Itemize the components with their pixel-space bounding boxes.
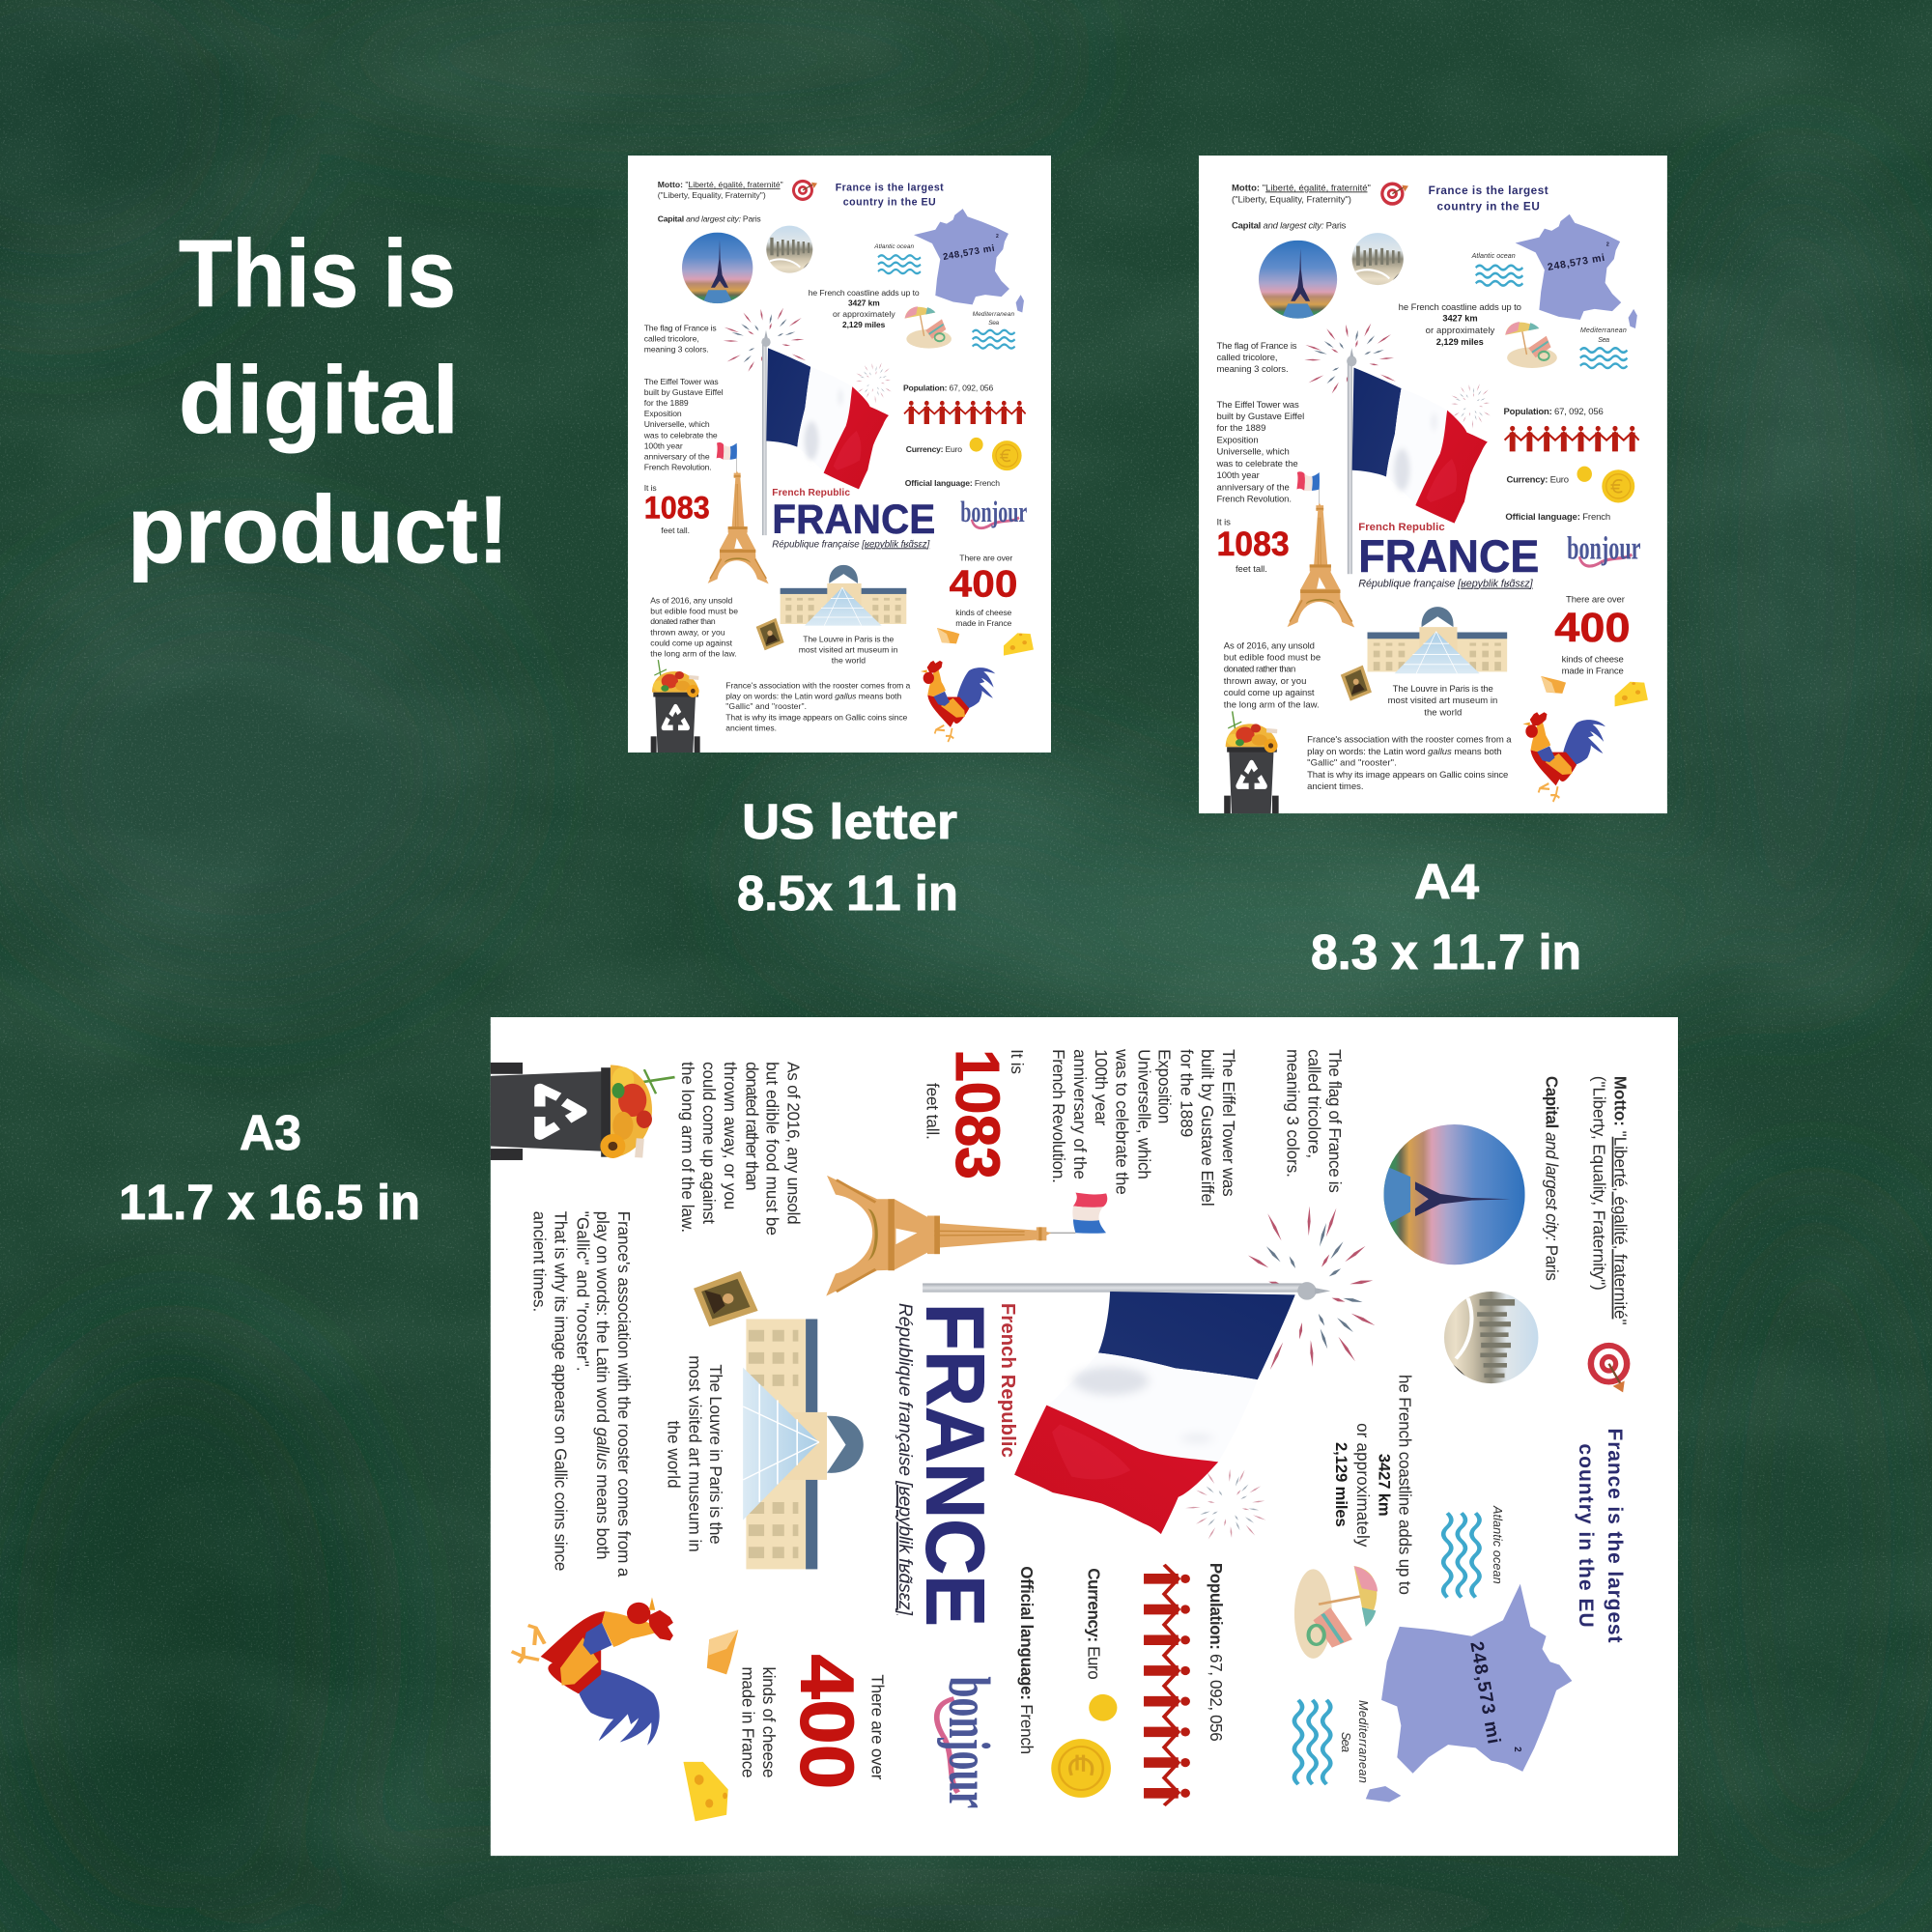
stat: 1083 feet: It is (1008, 1049, 1026, 1074)
icon: euro coins (1051, 1694, 1117, 1798)
icon: euro coins (1577, 467, 1634, 502)
title block: FRANCE (908, 1303, 1000, 1627)
stat: 1083 feet: 1083 (644, 491, 710, 526)
stat: 1083 feet: feet tall. (661, 526, 690, 535)
Eiffel history text: for the 1889 (1177, 1049, 1195, 1137)
photo: Paris bridge (765, 224, 814, 275)
map of France (914, 209, 1024, 312)
food law text: the long arm of the law. (650, 648, 737, 658)
Eiffel history text: built by Gustave Eiffel (644, 387, 724, 397)
photo: Eiffel Tower at dusk (679, 233, 756, 303)
artwork layer (1224, 182, 1648, 813)
Louvre text: most visited art museum in (1388, 696, 1497, 706)
fireworks small (1185, 1469, 1266, 1540)
bonjour lettering: bonjour (960, 495, 1027, 528)
motto: Motto: "Liberté, égalité, fraternité" (658, 180, 783, 189)
coastline text: he French coastline adds up to (809, 288, 920, 298)
icon: people (904, 401, 1026, 424)
coastline text: he French coastline adds up to (1399, 302, 1521, 313)
label: Mediterranean Sea (1339, 1700, 1370, 1783)
stat: 400 cheeses (1554, 594, 1631, 677)
stat: 1083 feet: 1083 (1216, 526, 1290, 563)
motto: Motto: " Liberté, égalité, fraternité " (1610, 1076, 1629, 1325)
stat: 400 cheeses (738, 1654, 886, 1790)
fireworks small (1451, 384, 1491, 428)
Louvre text: the world (1424, 707, 1462, 718)
stat: 400 cheeses: kinds of cheese (759, 1666, 778, 1777)
caption: A4 (1311, 854, 1581, 980)
caption: A3 (119, 1105, 420, 1230)
Eiffel history text: was to celebrate the (1113, 1048, 1131, 1195)
poster sheet (1199, 156, 1667, 813)
stat: 1083 feet: feet tall. (1236, 564, 1267, 575)
motto (658, 180, 783, 200)
capital: Capital and largest city: Paris (1232, 221, 1347, 232)
map of France (1516, 214, 1637, 328)
icon: beach (1294, 1566, 1378, 1659)
artwork layer (651, 180, 1034, 753)
language: Official language: French (1017, 1566, 1036, 1754)
Louvre text: most visited art museum in (799, 645, 898, 655)
motto: ("Liberty, Equality, Fraternity") (658, 190, 766, 200)
rooster text: "Gallic" and "rooster". (573, 1211, 591, 1372)
heading: largest country (1575, 1429, 1626, 1643)
Eiffel history text: The Eiffel Tower was (1216, 400, 1299, 411)
bonjour swirl (972, 518, 1019, 528)
label: Atlantic ocean: Atlantic ocean (1471, 253, 1516, 260)
food law text: donated rather than (1224, 664, 1295, 674)
stat: 1083 feet (923, 1049, 1026, 1179)
photo: Eiffel Tower at dusk (1256, 241, 1342, 319)
food law text: thrown away, or you (721, 1062, 739, 1209)
rooster text: ancient times. (1307, 781, 1363, 792)
population: Population: 67, 092, 056 (1503, 407, 1604, 417)
title block: French Republic (1358, 522, 1445, 533)
poster: A4 (1199, 156, 1667, 813)
Eiffel history text: for the 1889 (1216, 423, 1265, 434)
coastline text (1399, 302, 1521, 347)
food law text: As of 2016, any unsold (783, 1062, 803, 1225)
motto: ("Liberty, Equality, Fraternity") (1589, 1076, 1608, 1291)
food law text: the long arm of the law. (678, 1062, 696, 1233)
Eiffel history text: French Revolution. (1216, 494, 1292, 504)
food law text: could come up against (650, 638, 733, 647)
rooster text: That is why its image appears on Gallic coins since (1307, 770, 1508, 781)
caption: US letter: US letter (742, 794, 957, 849)
Eiffel history text: 100th year (1092, 1049, 1110, 1126)
Eiffel history text (1215, 400, 1304, 504)
icon: Mediterranean waves (1294, 1700, 1330, 1784)
stat: 400 cheeses: 400 (784, 1654, 868, 1790)
headline: product! (128, 476, 509, 582)
Eiffel history text: anniversary of the (1070, 1049, 1089, 1179)
Eiffel history text: built by Gustave Eiffel (1198, 1049, 1216, 1207)
poster: A3 rotated (491, 1017, 1678, 1856)
icon: cheese block (1615, 682, 1648, 706)
rooster text: France's association with the rooster comes from a (614, 1211, 633, 1577)
language: Official language: French (1505, 512, 1610, 523)
Eiffel history text: anniversary of the (644, 451, 710, 461)
heading: largest country: France is the largest (836, 182, 944, 193)
rooster text (725, 680, 911, 732)
icon: cheese wedge (937, 628, 959, 643)
heading: largest country (1429, 185, 1548, 213)
stat: 1083 feet: It is (644, 483, 657, 493)
rooster text: "Gallic" and "rooster". (1307, 757, 1397, 768)
Louvre text (1388, 684, 1497, 718)
label: Mediterranean Sea: Mediterranean (1356, 1700, 1370, 1783)
food law text (1224, 641, 1321, 710)
coastline text: he French coastline adds up to (1396, 1375, 1414, 1595)
Louvre text: the world (664, 1421, 682, 1489)
map area label (1547, 242, 1609, 273)
tricolore text (644, 324, 717, 354)
title block: French Republic (772, 488, 850, 498)
Louvre text (664, 1355, 724, 1552)
Eiffel history text: French Revolution. (644, 462, 712, 471)
poster sheet (491, 1017, 1678, 1856)
Louvre text: The Louvre in Paris is the (803, 635, 895, 644)
Eiffel history text: 100th year (644, 440, 683, 450)
Eiffel history text (643, 377, 724, 471)
Eiffel history text (1049, 1048, 1237, 1207)
headline: This is (179, 220, 456, 327)
stat: 400 cheeses: 400 (950, 563, 1017, 605)
coastline text: 3427 km (848, 298, 880, 307)
map area label: 2 (1606, 242, 1609, 248)
rooster text: ancient times. (725, 723, 777, 732)
Eiffel Tower (1288, 502, 1354, 628)
tricolore text: called tricolore, (1305, 1049, 1323, 1158)
poster sheet (628, 156, 1051, 753)
title block: République française [ʁepyblik fʁɑ̃sɛz] (895, 1303, 916, 1616)
food law text: the long arm of the law. (1224, 699, 1320, 710)
stat: 400 cheeses: kinds of cheese (1562, 655, 1624, 666)
currency: Currency: Euro (1506, 474, 1569, 485)
motto (1232, 183, 1371, 205)
Louvre text: the world (832, 656, 866, 666)
Eiffel history text: 100th year (1216, 470, 1260, 481)
Eiffel history text: was to celebrate the (643, 430, 718, 440)
map area label: 248,573 mi (1547, 252, 1605, 273)
tricolore text: called tricolore, (644, 333, 699, 343)
capital: Capital and largest city: Paris (1543, 1076, 1561, 1281)
label: Mediterranean Sea: Sea (988, 320, 999, 327)
rooster text: play on words: the Latin word gallus means both (1307, 747, 1502, 757)
bonjour lettering: bonjour (1567, 530, 1641, 567)
icon: beach (905, 306, 952, 349)
rooster text: ancient times. (530, 1211, 549, 1312)
coastline text: 3427 km (1376, 1454, 1394, 1517)
Eiffel history text: The Eiffel Tower was (1219, 1049, 1237, 1197)
currency: Currency: Euro (906, 444, 962, 454)
rooster text: That is why its image appears on Gallic coins since (551, 1211, 569, 1571)
Eiffel Tower (708, 470, 769, 583)
language: Official language: French (905, 478, 1000, 488)
Eiffel history text: French Revolution. (1049, 1049, 1067, 1183)
icon: beach (1505, 322, 1557, 368)
tricolore text: The flag of France is (644, 324, 717, 333)
French flag (761, 330, 889, 535)
Eiffel history text: Universelle, which (1216, 446, 1290, 457)
food waste bin (1224, 711, 1279, 813)
coastline text: or approximately (1426, 326, 1495, 336)
photo: Paris bridge (1350, 231, 1406, 287)
Eiffel history text: anniversary of the (1216, 482, 1290, 493)
coastline text: or approximately (833, 309, 895, 319)
food waste bin (651, 660, 700, 753)
rooster text: "Gallic" and "rooster". (725, 701, 807, 711)
Eiffel history text: for the 1889 (644, 398, 689, 408)
tricolore text: The flag of France is (1325, 1049, 1344, 1193)
fireworks small (856, 362, 892, 403)
icon: Mediterranean waves (1580, 348, 1627, 368)
icon: target (792, 180, 817, 201)
food law text: but edible food must be (1224, 653, 1321, 664)
map area label: 2 (1512, 1747, 1522, 1752)
icon: Mona Lisa (756, 618, 784, 650)
Louvre (743, 1319, 864, 1569)
rooster text (1307, 735, 1512, 792)
caption: US letter (737, 794, 958, 921)
heading: largest country: country in the EU (1575, 1443, 1597, 1628)
icon: Mona Lisa (1341, 666, 1372, 701)
photo: Paris bridge (1440, 1289, 1542, 1387)
fireworks large (1304, 323, 1396, 405)
tricolore text (1284, 1049, 1344, 1193)
icon: people (1144, 1565, 1190, 1805)
title block: FRANCE (772, 497, 935, 543)
rooster (1522, 712, 1605, 802)
food law text (678, 1062, 803, 1236)
coastline text: or approximately (1353, 1423, 1372, 1548)
capital: Capital and largest city: Paris (658, 214, 761, 224)
map area label (942, 234, 999, 263)
photo: Eiffel Tower at dusk (1383, 1120, 1525, 1272)
icon: target (1588, 1343, 1630, 1392)
Eiffel history text: built by Gustave Eiffel (1216, 412, 1304, 422)
label: Atlantic ocean: Atlantic ocean (1491, 1505, 1504, 1584)
Louvre text: most visited art museum in (685, 1355, 703, 1552)
food law text: thrown away, or you (650, 627, 725, 637)
icon: cheese wedge (707, 1630, 738, 1674)
Louvre (1368, 607, 1507, 673)
map area label: 248,573 mi (1465, 1640, 1504, 1746)
Louvre text: The Louvre in Paris is the (1393, 684, 1493, 695)
tricolore text: meaning 3 colors. (1216, 364, 1289, 375)
food law text: As of 2016, any unsold (650, 595, 733, 605)
stat: 400 cheeses: made in France (955, 618, 1012, 628)
title block: République française [ʁepyblik fʁɑ̃sɛz] (1358, 579, 1534, 590)
stat: 1083 feet: It is (1216, 517, 1231, 527)
tricolore text: meaning 3 colors. (1284, 1049, 1302, 1178)
heading: largest country: country in the EU (843, 196, 936, 208)
Eiffel history text: Exposition (1216, 436, 1259, 446)
rooster text: play on words: the Latin word gallus means both (725, 692, 902, 701)
food law text: but edible food must be (650, 606, 738, 615)
Eiffel history text: Universelle, which (1134, 1049, 1153, 1179)
caption: A4: A4 (1414, 854, 1480, 909)
rooster text: play on words: the Latin word gallus means both (593, 1211, 611, 1560)
label: Mediterranean Sea: Mediterranean (1580, 327, 1627, 334)
map area label: 2 (996, 234, 999, 240)
icon: euro coins (970, 438, 1022, 470)
food law text: donated rather than (742, 1062, 760, 1191)
stat: 1083 feet (1216, 517, 1290, 575)
label: Mediterranean Sea: Mediterranean (973, 311, 1014, 318)
icon: small flag (1296, 471, 1320, 504)
Eiffel history text: Universelle, which (644, 419, 710, 429)
food law text: thrown away, or you (1224, 676, 1306, 687)
food law text: As of 2016, any unsold (1224, 641, 1315, 652)
stat: 400 cheeses: There are over (1566, 594, 1625, 605)
food law text: donated rather than (650, 616, 716, 626)
rooster text: France's association with the rooster comes from a (1307, 735, 1512, 746)
food law text: but edible food must be (763, 1062, 781, 1236)
stat: 1083 feet: feet tall. (923, 1083, 941, 1140)
rooster text (530, 1211, 633, 1577)
food law text: could come up against (1224, 688, 1315, 698)
French flag (1347, 348, 1488, 574)
icon: people (1505, 426, 1639, 451)
stat: 400 cheeses: There are over (959, 554, 1012, 563)
fireworks large (1229, 1207, 1376, 1371)
caption: US letter: 8.5x 11 in (737, 866, 958, 921)
coastline text: 2,129 miles (842, 320, 886, 329)
tricolore text (1216, 341, 1297, 375)
rooster text: France's association with the rooster comes from a (725, 680, 911, 690)
stat: 400 cheeses: made in France (1562, 667, 1624, 677)
title block: FRANCE (1358, 531, 1539, 582)
tricolore text: The flag of France is (1216, 341, 1297, 352)
label: Mediterranean Sea: Sea (1339, 1732, 1352, 1752)
coastline text (1332, 1375, 1414, 1595)
motto: Motto: "Liberté, égalité, fraternité" (1232, 183, 1371, 193)
food law text (650, 595, 738, 658)
caption: A4: 8.3 x 11.7 in (1311, 924, 1581, 980)
label: Mediterranean Sea (973, 311, 1014, 327)
motto (1589, 1076, 1629, 1325)
coastline text: 2,129 miles (1332, 1442, 1350, 1527)
icon: Mona Lisa (694, 1271, 758, 1326)
icon: target (1380, 182, 1408, 206)
map of France (1366, 1584, 1572, 1803)
label: Mediterranean Sea: Sea (1598, 337, 1609, 344)
icon: Atlantic waves (878, 255, 921, 273)
heading: largest country: country in the EU (1437, 201, 1540, 213)
icon: Atlantic waves (1476, 266, 1522, 286)
Eiffel history text: The Eiffel Tower was (644, 377, 719, 386)
Louvre text: The Louvre in Paris is the (706, 1364, 724, 1545)
icon: Atlantic waves (1443, 1513, 1480, 1597)
currency: Currency: Euro (1084, 1568, 1102, 1680)
heading: largest country (836, 182, 944, 208)
stat: 400 cheeses: There are over (867, 1674, 886, 1780)
Eiffel history text: Exposition (644, 409, 682, 418)
coastline text: 2,129 miles (1436, 337, 1484, 347)
motto: ("Liberty, Equality, Fraternity") (1232, 195, 1351, 205)
map area label (1465, 1640, 1522, 1752)
heading: largest country: France is the largest (1604, 1429, 1626, 1643)
stat: 400 cheeses: kinds of cheese (955, 608, 1012, 617)
tricolore text: meaning 3 colors. (644, 344, 709, 354)
food waste bin (491, 1063, 675, 1160)
icon: small flag (717, 442, 737, 472)
caption: A3: 11.7 x 16.5 in (119, 1175, 420, 1230)
headline (128, 220, 509, 582)
stat: 400 cheeses: made in France (738, 1666, 756, 1777)
stat: 1083 feet: 1083 (943, 1049, 1011, 1179)
label: Mediterranean Sea (1580, 327, 1627, 344)
label: Atlantic ocean: Atlantic ocean (873, 243, 914, 250)
icon: cheese block (683, 1762, 728, 1821)
bonjour swirl (937, 1699, 958, 1793)
headline: digital (179, 347, 459, 453)
population: Population: 67, 092, 056 (1207, 1563, 1225, 1742)
caption: A3: A3 (240, 1105, 301, 1160)
tricolore text: called tricolore, (1216, 353, 1278, 363)
French flag (923, 1282, 1330, 1534)
stat: 400 cheeses (950, 554, 1017, 628)
Eiffel Tower (826, 1176, 1051, 1296)
rooster (512, 1597, 673, 1746)
icon: Mediterranean waves (973, 330, 1015, 349)
Eiffel history text: was to celebrate the (1215, 459, 1298, 469)
Louvre (781, 565, 906, 626)
coastline text: 3427 km (1442, 313, 1478, 323)
icon: cheese wedge (1541, 676, 1566, 694)
coastline text (809, 288, 920, 329)
stat: 1083 feet (644, 483, 710, 535)
icon: cheese block (1004, 633, 1034, 656)
Louvre text (799, 635, 898, 666)
heading: largest country: France is the largest (1429, 185, 1548, 197)
map area label: 248,573 mi (942, 243, 995, 263)
bonjour lettering: bonjour (936, 1676, 1002, 1808)
rooster (921, 661, 995, 742)
title block: French Republic (997, 1303, 1018, 1458)
population: Population: 67, 092, 056 (903, 383, 994, 392)
artwork layer (491, 1063, 1630, 1821)
rooster text: That is why its image appears on Gallic coins since (725, 713, 908, 723)
bonjour swirl (1579, 554, 1632, 566)
fireworks large (724, 307, 807, 382)
Eiffel history text: Exposition (1155, 1049, 1174, 1123)
title block: République française [ʁepyblik fʁɑ̃sɛz] (772, 539, 930, 550)
food law text: could come up against (699, 1062, 718, 1224)
stat: 400 cheeses: 400 (1554, 605, 1631, 651)
icon: small flag (1048, 1193, 1107, 1234)
poster: US letter (628, 156, 1051, 753)
